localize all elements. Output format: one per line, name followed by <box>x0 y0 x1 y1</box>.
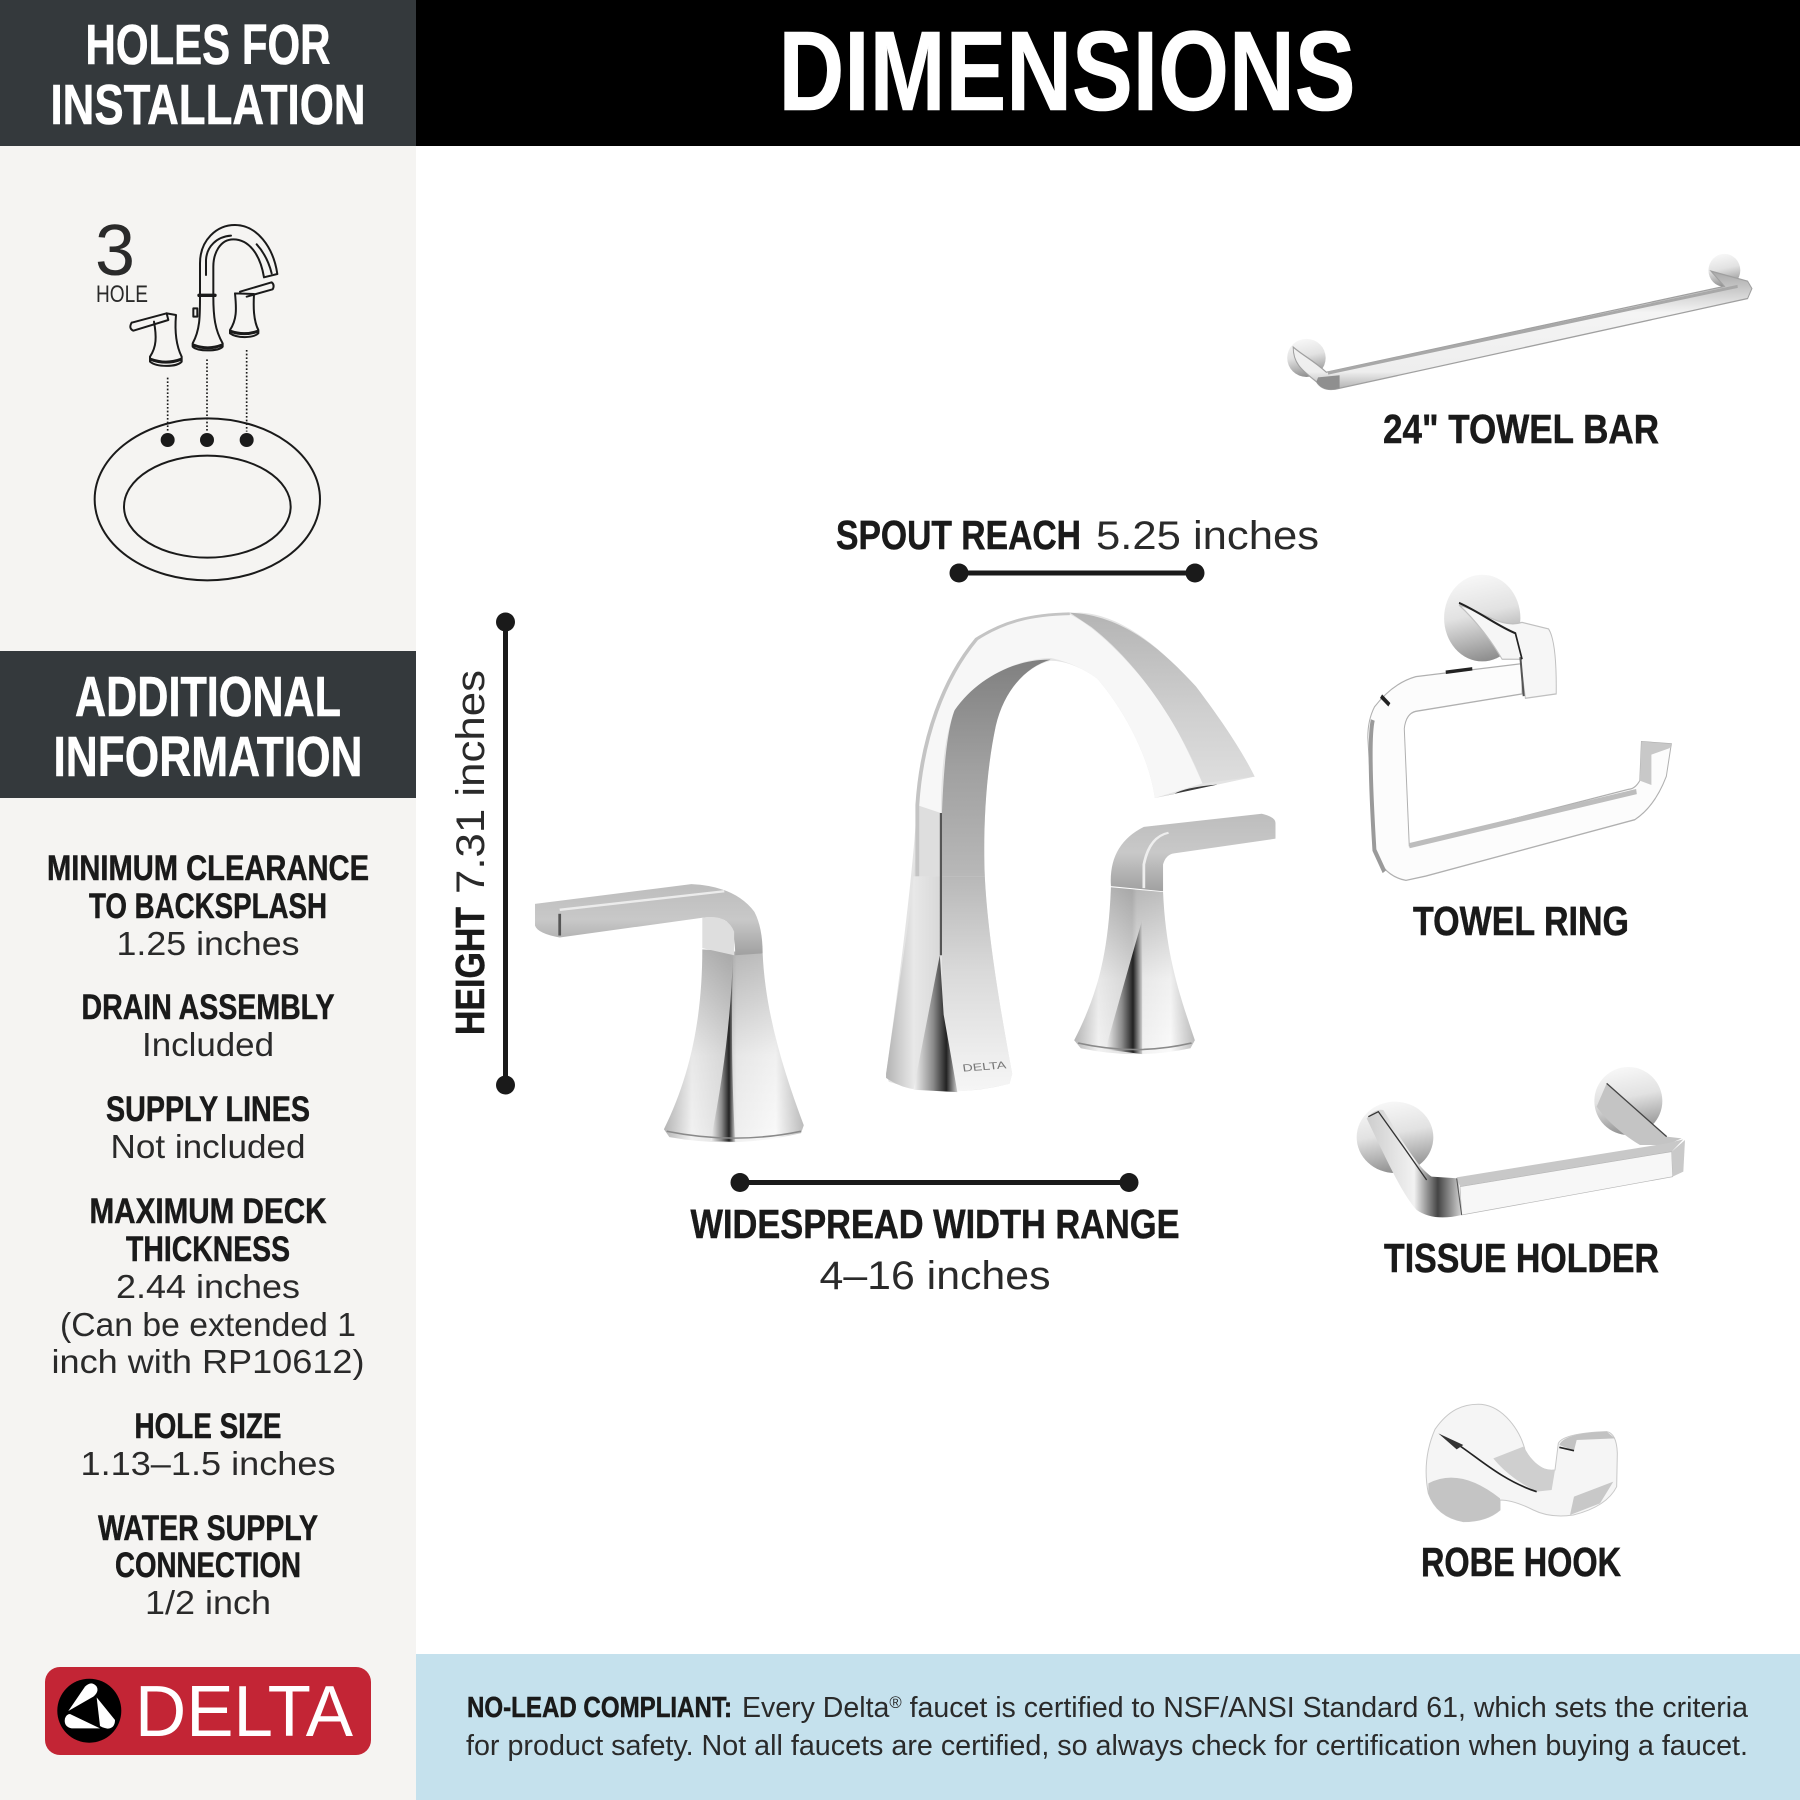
arrow: spout reach dimension line <box>950 564 1204 582</box>
label: 24 inch towel bar: 24" TOWEL BAR <box>1383 406 1659 452</box>
text block: water supply connection: CONNECTION <box>115 1546 301 1585</box>
text block: maximum deck thickness: MAXIMUM DECK <box>90 1192 326 1231</box>
text block: water supply connection <box>98 1509 318 1621</box>
label: towel ring: TOWEL RING <box>1413 898 1629 944</box>
illustration: towel bar <box>1287 254 1752 390</box>
text block: supply lines <box>106 1090 310 1165</box>
panel: no-lead compliance note: Every Delta <box>742 1692 892 1724</box>
panel: additional information header: INFORMATION <box>54 725 362 789</box>
spout <box>886 613 1255 1092</box>
text block: minimum clearance <box>47 849 369 962</box>
label: height: 7.31 inches <box>449 670 493 894</box>
text block: supply lines: SUPPLY LINES <box>106 1090 310 1129</box>
panel: no-lead compliance note: ® <box>889 1693 902 1712</box>
text block: maximum deck thickness <box>52 1192 364 1380</box>
label: widespread width range: 4–16 inches <box>820 1254 1050 1298</box>
illustration: towel ring <box>1368 575 1671 880</box>
panel: holes for installation header: HOLES FOR <box>86 13 330 77</box>
label: spout reach: 5.25 inches <box>1096 514 1319 558</box>
panel: no-lead compliance note: faucet is certified to NSF/ANSI Standard 61, which sets the criteria <box>902 1692 1749 1724</box>
panel: additional information header: ADDITIONAL <box>75 665 341 729</box>
label: spout reach <box>836 512 1319 558</box>
label: spout reach: SPOUT REACH <box>836 512 1081 558</box>
icon: 3 hole sink and faucet diagram: HOLE <box>96 281 148 308</box>
illustration: widespread faucet <box>535 613 1275 1142</box>
text block: supply lines: Not included <box>110 1128 306 1165</box>
panel: holes for installation header: INSTALLATION <box>50 73 366 137</box>
text block: drain assembly: Included <box>142 1026 274 1063</box>
panel: left sidebar <box>0 0 416 1800</box>
panel: no-lead compliance note <box>416 1654 1800 1800</box>
label: widespread width range: WIDESPREAD WIDTH RANGE <box>690 1201 1180 1247</box>
label: height <box>447 670 493 1035</box>
text block: minimum clearance: 1.25 inches <box>116 925 300 962</box>
icon: delta logo <box>45 1667 371 1755</box>
text block: water supply connection: 1/2 inch <box>145 1584 271 1621</box>
panel: additional information header <box>0 651 416 798</box>
left handle <box>535 884 804 1142</box>
text block: maximum deck thickness: 2.44 inches <box>116 1268 300 1305</box>
text block: drain assembly <box>82 988 334 1063</box>
text block: hole size <box>80 1407 336 1482</box>
title: dimensions header <box>416 0 1800 146</box>
arrow: height dimension line <box>496 612 515 1094</box>
text block: maximum deck thickness: THICKNESS <box>126 1230 290 1269</box>
icon: 3 hole sink and faucet diagram <box>95 211 320 580</box>
arrow: widespread width dimension line <box>730 1173 1138 1192</box>
label: widespread width range <box>690 1201 1180 1298</box>
panel: no-lead compliance note: NO-LEAD COMPLIANT: <box>467 1692 732 1724</box>
text block: maximum deck thickness: (Can be extended 1 <box>60 1306 356 1343</box>
label: tissue holder: TISSUE HOLDER <box>1384 1235 1659 1281</box>
icon: delta logo: DELTA <box>135 1672 353 1752</box>
spout: DELTA <box>962 1059 1008 1074</box>
icon: 3 hole sink and faucet diagram: 3 <box>95 211 135 291</box>
title: dimensions header: DIMENSIONS <box>778 8 1356 134</box>
right handle <box>1074 814 1275 1054</box>
label: robe hook: ROBE HOOK <box>1421 1539 1621 1585</box>
illustration: tissue holder <box>1357 1067 1685 1217</box>
text block: maximum deck thickness: inch with RP10612) <box>52 1343 364 1380</box>
text block: drain assembly: DRAIN ASSEMBLY <box>82 988 334 1027</box>
text block: water supply connection: WATER SUPPLY <box>98 1509 318 1548</box>
panel: holes for installation header <box>0 0 416 146</box>
illustration: robe hook <box>1426 1404 1617 1522</box>
label: height: HEIGHT <box>447 907 493 1035</box>
panel: no-lead compliance note: for product safety. Not all faucets are certified, so always check for certification when buying a faucet. <box>466 1730 1748 1762</box>
text block: hole size: HOLE SIZE <box>134 1407 282 1446</box>
text block: hole size: 1.13–1.5 inches <box>80 1445 336 1482</box>
text block: minimum clearance: MINIMUM CLEARANCE <box>47 849 369 888</box>
text block: minimum clearance: TO BACKSPLASH <box>89 887 327 926</box>
